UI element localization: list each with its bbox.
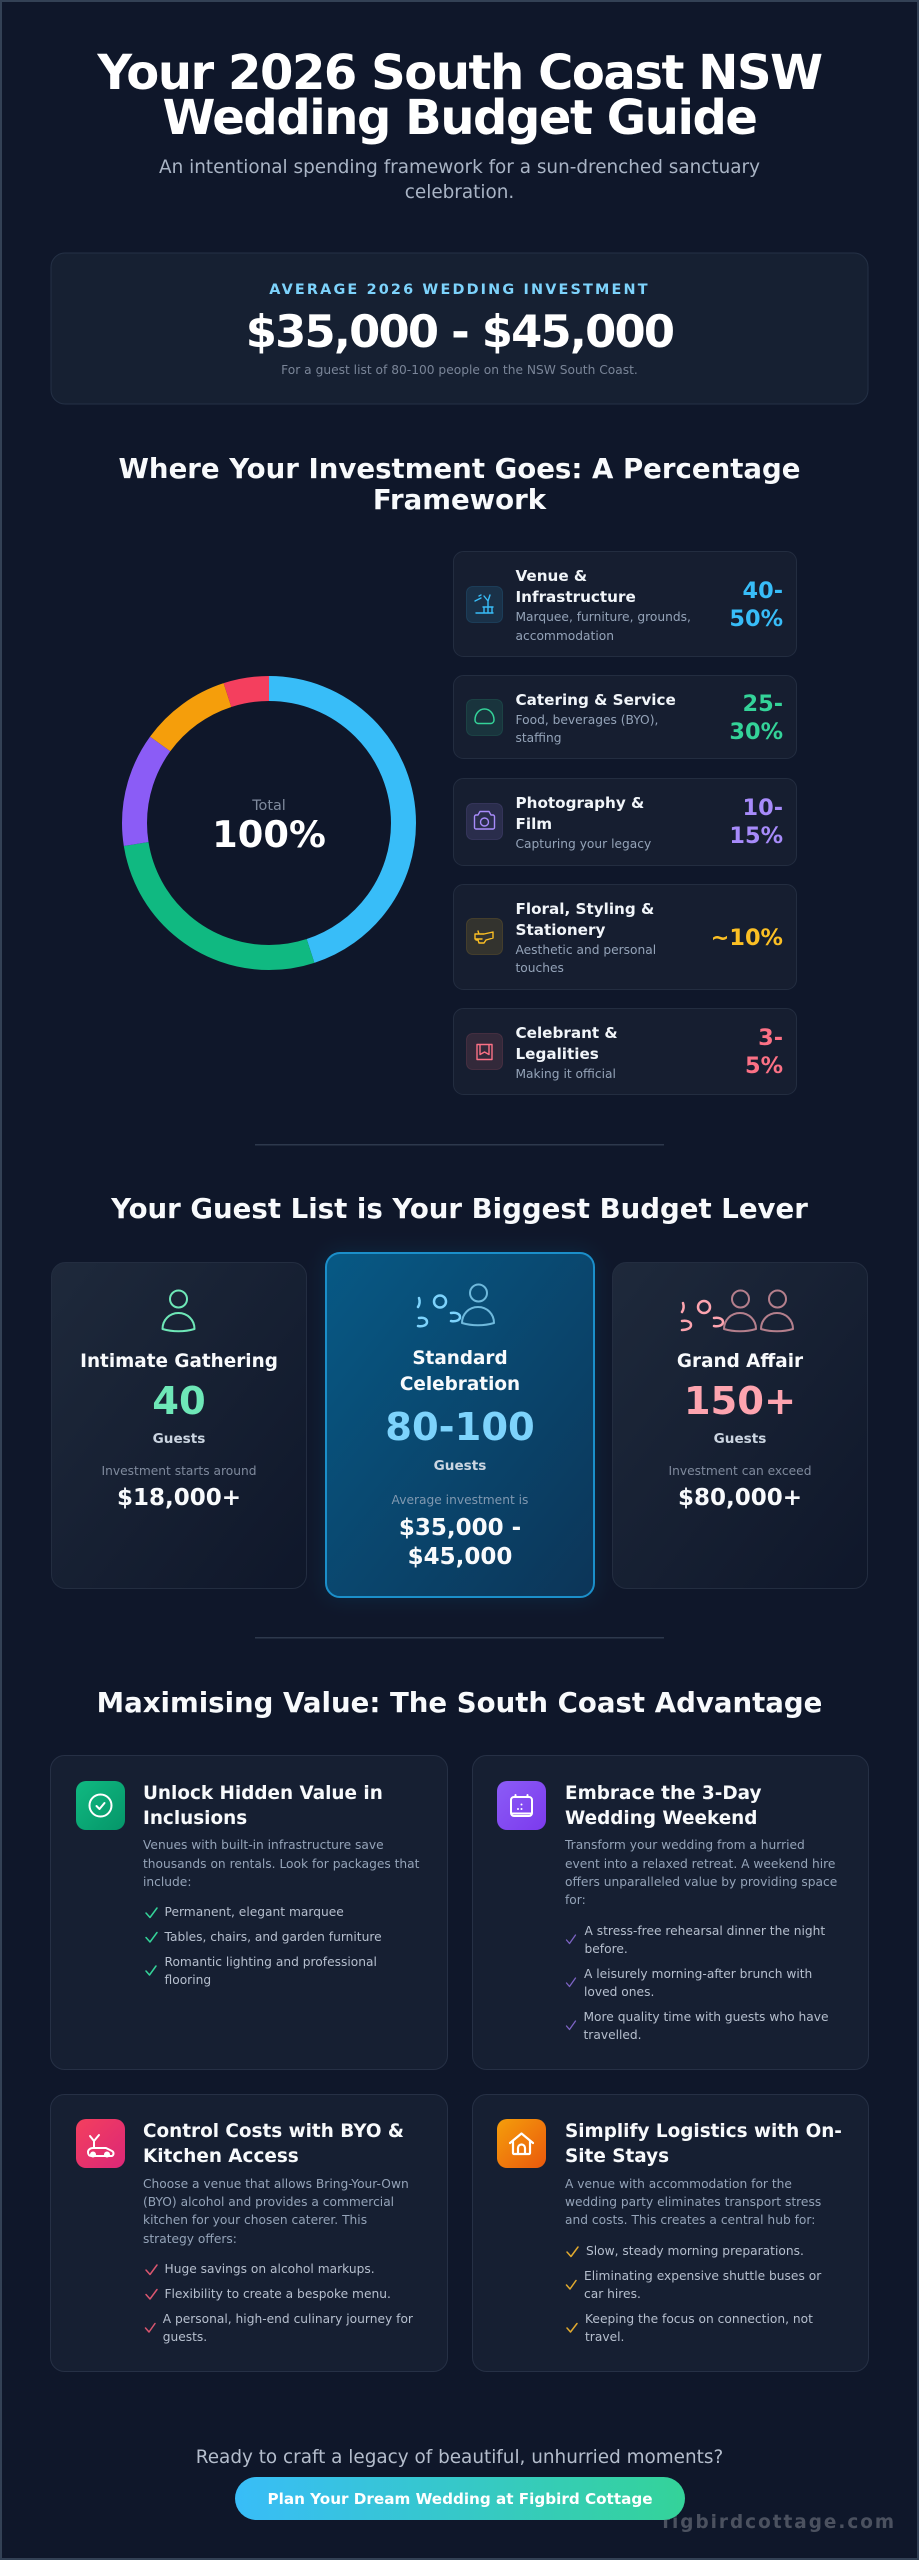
BYO checklist: A personal, high-end culinary journey for bbox=[163, 2312, 414, 2326]
title bbox=[96, 45, 822, 146]
heading: where your investment goes: Framework bbox=[373, 483, 547, 516]
BYO checklist: Flexibility to create a bespoke menu. bbox=[164, 2287, 391, 2301]
standard investment label: Average investment is bbox=[392, 1493, 528, 1507]
intimate title: Intimate Gathering bbox=[80, 1351, 278, 1372]
footer prompt: Ready to craft a legacy of beautiful, unhurried moments? bbox=[196, 2447, 723, 2468]
venue percentage bbox=[729, 578, 783, 632]
title: Your 2026 South Coast NSW bbox=[96, 45, 822, 101]
floral text bbox=[516, 900, 656, 975]
grand investment label: Investment can exceed bbox=[669, 1464, 811, 1478]
venue text: accommodation bbox=[516, 629, 614, 643]
icon: celebrant bbox=[466, 1034, 502, 1070]
panel: on-site stays bbox=[472, 2094, 868, 2372]
on-site checklist: Slow, steady morning preparations. bbox=[586, 2244, 804, 2258]
hidden value title: Inclusions bbox=[143, 1808, 247, 1829]
on-site title: Simplify Logistics with On- bbox=[565, 2121, 842, 2142]
catering text: Food, beverages (BYO), bbox=[516, 713, 658, 727]
floral text: Floral, Styling & bbox=[516, 900, 654, 918]
hidden value checklist: flooring bbox=[164, 1973, 211, 1987]
catering percentage bbox=[729, 691, 783, 745]
floral text: Stationery bbox=[516, 921, 605, 939]
weekend description: offers unparalleled value by providing space bbox=[565, 1875, 837, 1889]
intimate investment label: Investment starts around bbox=[102, 1464, 256, 1478]
weekend description: for: bbox=[565, 1893, 586, 1907]
subtitle: celebration. bbox=[405, 182, 514, 203]
BYO title bbox=[143, 2121, 404, 2167]
grand price: $80,000+ bbox=[678, 1485, 802, 1511]
average label: AVERAGE 2026 WEDDING INVESTMENT bbox=[269, 282, 650, 298]
legend: photography bbox=[454, 778, 796, 866]
standard guest count: 80-100 bbox=[385, 1405, 535, 1450]
venue text: Infrastructure bbox=[516, 588, 636, 606]
venue text: Marquee, furniture, grounds, bbox=[516, 610, 691, 624]
call to action button: Plan Your Dream Wedding at Figbird Cottage bbox=[268, 2490, 652, 2508]
catering text bbox=[516, 691, 676, 745]
weekend checklist: travelled. bbox=[584, 2028, 642, 2042]
title: Wedding Budget Guide bbox=[162, 90, 757, 146]
icon: group of people bbox=[418, 1284, 494, 1326]
photography percentage: 15% bbox=[729, 823, 783, 849]
icon: single person bbox=[162, 1290, 194, 1331]
standard price bbox=[399, 1515, 521, 1570]
hidden value description bbox=[143, 1838, 420, 1889]
weekend title bbox=[565, 1783, 761, 1829]
celebrant text bbox=[516, 1024, 618, 1081]
BYO checklist bbox=[146, 2262, 414, 2344]
hidden value title: Unlock Hidden Value in bbox=[143, 1783, 383, 1804]
standard title: Standard bbox=[412, 1348, 508, 1369]
celebrant text: Legalities bbox=[516, 1045, 599, 1063]
intimate guest count: 40 bbox=[152, 1379, 206, 1424]
weekend checklist: A stress-free rehearsal dinner the night bbox=[584, 1924, 825, 1938]
photography text: Photography & bbox=[516, 794, 644, 812]
subtitle bbox=[159, 157, 760, 203]
catering text: staffing bbox=[516, 731, 562, 745]
floral text: touches bbox=[516, 961, 564, 975]
floral percentage: ~10% bbox=[711, 925, 783, 951]
hidden value description: thousands on rentals. Look for packages that bbox=[143, 1857, 420, 1871]
hidden value checklist: Permanent, elegant marquee bbox=[164, 1905, 344, 1919]
weekend description: Transform your wedding from a hurried bbox=[564, 1838, 805, 1852]
weekend title: Wedding Weekend bbox=[565, 1808, 757, 1829]
icon: check circle bbox=[76, 1781, 125, 1830]
BYO description: (BYO) alcohol and provides a commercial bbox=[143, 2195, 394, 2209]
hidden value checklist bbox=[146, 1905, 382, 1987]
on-site title bbox=[565, 2121, 842, 2167]
BYO description bbox=[143, 2177, 409, 2246]
icon: house bbox=[497, 2119, 546, 2168]
weekend checklist: before. bbox=[584, 1942, 628, 1956]
weekend description bbox=[564, 1838, 837, 1907]
BYO description: kitchen for your chosen caterer. This bbox=[143, 2213, 367, 2227]
photography text: Film bbox=[516, 815, 552, 833]
standard guests label: Guests bbox=[434, 1458, 486, 1474]
legend: venue bbox=[454, 552, 796, 656]
heading: where your investment goes bbox=[118, 452, 801, 516]
panel: grand affair bbox=[612, 1262, 868, 1588]
celebrant percentage: 5% bbox=[745, 1053, 783, 1079]
venue percentage: 40- bbox=[743, 578, 783, 604]
on-site checklist bbox=[566, 2244, 822, 2344]
standard price: $35,000 - bbox=[399, 1515, 521, 1541]
weekend checklist: More quality time with guests who have bbox=[584, 2010, 828, 2024]
weekend description: event into a relaxed retreat. A weekend hire bbox=[565, 1857, 835, 1871]
heading: guest list: Your Guest List is Your Biggest Budget Lever bbox=[110, 1192, 808, 1225]
on-site checklist: Eliminating expensive shuttle buses or bbox=[584, 2269, 822, 2283]
panel: 3-day weekend bbox=[472, 1756, 868, 2070]
grand title: Grand Affair bbox=[677, 1351, 804, 1372]
celebrant percentage bbox=[745, 1025, 783, 1079]
venue text: Venue & bbox=[516, 567, 587, 585]
legend: celebrant bbox=[454, 1008, 796, 1094]
photography percentage: 10- bbox=[743, 795, 783, 821]
on-site checklist: travel. bbox=[585, 2330, 624, 2344]
icon: calendar bbox=[497, 1781, 546, 1830]
weekend title: Embrace the 3-Day bbox=[565, 1783, 761, 1804]
celebrant percentage: 3- bbox=[758, 1025, 783, 1051]
catering percentage: 25- bbox=[743, 691, 783, 717]
panel: standard celebration bbox=[326, 1253, 594, 1597]
photography text bbox=[516, 794, 651, 851]
legend: catering bbox=[454, 676, 796, 758]
heading: where your investment goes: Where Your Investment Goes: A Percentage bbox=[118, 452, 801, 485]
call to action button bbox=[235, 2477, 685, 2520]
celebrant text: Celebrant & bbox=[516, 1024, 618, 1042]
icon: floral bbox=[466, 918, 502, 954]
on-site title: Site Stays bbox=[565, 2146, 669, 2167]
hidden value description: include: bbox=[143, 1875, 191, 1889]
hidden value title bbox=[143, 1783, 383, 1829]
BYO description: Choose a venue that allows Bring-Your-Own bbox=[143, 2177, 409, 2191]
panel: intimate gathering bbox=[52, 1262, 306, 1588]
photography percentage bbox=[729, 795, 783, 849]
icon: BYO bbox=[76, 2119, 125, 2168]
photography text: Capturing your legacy bbox=[516, 837, 651, 851]
hidden value checklist: Romantic lighting and professional bbox=[164, 1955, 377, 1969]
icon: venue bbox=[466, 586, 502, 622]
panel: BYO bbox=[50, 2094, 448, 2372]
standard title: Celebration bbox=[400, 1374, 520, 1395]
celebrant text: Making it official bbox=[516, 1067, 616, 1081]
donut centre label: Total bbox=[251, 798, 286, 814]
watermark: figbirdcottage.com bbox=[662, 2512, 896, 2533]
BYO checklist: Huge savings on alcohol markups. bbox=[164, 2262, 375, 2276]
venue percentage: 50% bbox=[729, 606, 783, 632]
panel: average investment bbox=[51, 253, 868, 404]
hidden value description: Venues with built-in infrastructure save bbox=[143, 1838, 384, 1852]
on-site description: and costs. This creates a central hub for: bbox=[565, 2213, 815, 2227]
donut chart bbox=[134, 688, 404, 958]
heading: maximising value: Maximising Value: The South Coast Advantage bbox=[97, 1686, 822, 1719]
donut centre label: 100% bbox=[212, 813, 326, 856]
on-site checklist: car hires. bbox=[584, 2287, 641, 2301]
grand guest count: 150+ bbox=[684, 1379, 796, 1424]
hidden value checklist: Tables, chairs, and garden furniture bbox=[164, 1930, 382, 1944]
weekend checklist: A leisurely morning-after brunch with bbox=[584, 1967, 812, 1981]
grand guests label: Guests bbox=[714, 1431, 766, 1447]
standard price: $45,000 bbox=[408, 1544, 512, 1570]
BYO title: Kitchen Access bbox=[143, 2146, 299, 2167]
on-site checklist: Keeping the focus on connection, not bbox=[585, 2312, 813, 2326]
on-site description bbox=[565, 2177, 821, 2227]
BYO description: strategy offers: bbox=[143, 2232, 237, 2246]
catering percentage: 30% bbox=[729, 719, 783, 745]
weekend checklist: loved ones. bbox=[584, 1985, 654, 1999]
intimate price: $18,000+ bbox=[117, 1485, 241, 1511]
legend: floral bbox=[454, 884, 796, 990]
weekend checklist bbox=[566, 1924, 828, 2042]
catering text: Catering & Service bbox=[516, 691, 676, 709]
panel: hidden value bbox=[50, 1756, 448, 2070]
icon: large group of people bbox=[682, 1290, 793, 1331]
average note: For a guest list of 80-100 people on the NSW South Coast. bbox=[281, 363, 638, 377]
intimate guests label: Guests bbox=[153, 1431, 205, 1447]
icon: camera bbox=[466, 804, 502, 840]
icon: catering bbox=[466, 700, 502, 736]
subtitle: An intentional spending framework for a sun-drenched sanctuary bbox=[159, 157, 760, 178]
BYO title: Control Costs with BYO & bbox=[143, 2121, 404, 2142]
BYO checklist: guests. bbox=[163, 2330, 207, 2344]
on-site description: wedding party eliminates transport stress bbox=[565, 2195, 821, 2209]
average amount: $35,000 - $45,000 bbox=[246, 305, 674, 358]
venue text bbox=[516, 567, 691, 643]
on-site description: A venue with accommodation for the bbox=[565, 2177, 792, 2191]
standard title bbox=[400, 1348, 520, 1395]
floral text: Aesthetic and personal bbox=[516, 943, 656, 957]
